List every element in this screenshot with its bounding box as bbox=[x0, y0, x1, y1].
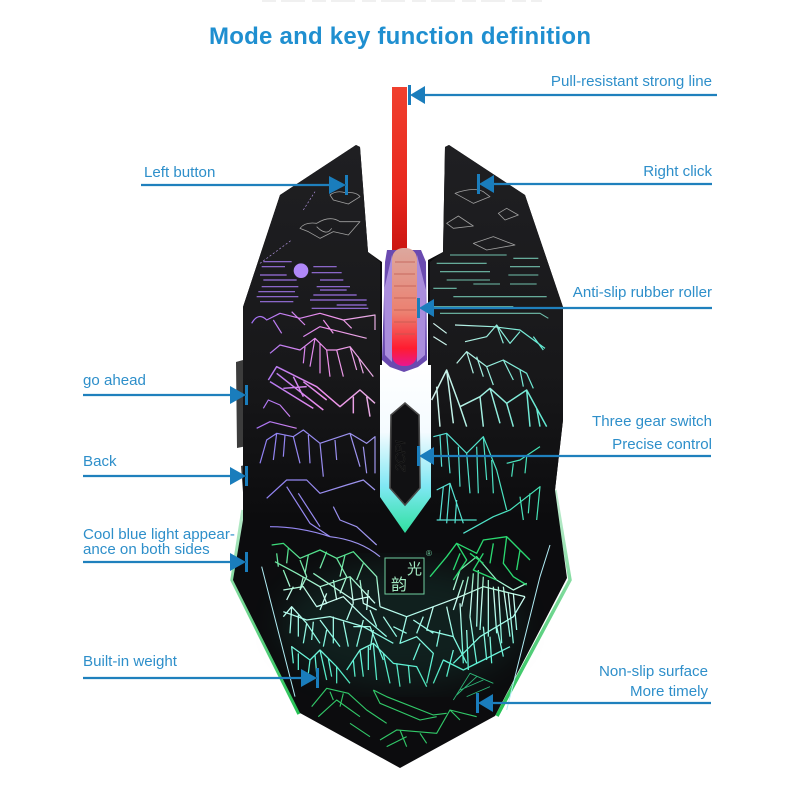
label: built-in weight: Built-in weight bbox=[83, 653, 178, 670]
label: right click bbox=[477, 163, 712, 194]
purple moon bbox=[294, 263, 308, 278]
lit line pattern upper bbox=[252, 190, 548, 428]
label: cool blue light: Cool blue light appear- bbox=[83, 526, 235, 543]
title: Mode and key function definition bbox=[209, 23, 591, 50]
label: cool blue light: ance on both sides bbox=[83, 541, 210, 558]
label: non-slip surface more timely: More timely bbox=[630, 683, 708, 700]
label: left button: Left button bbox=[144, 164, 215, 181]
logo mark bbox=[385, 549, 432, 594]
lit line pattern lower bbox=[262, 537, 550, 747]
lit line pattern middle bbox=[260, 430, 540, 557]
label: pull-resistant strong line: Pull-resistant strong line bbox=[551, 73, 712, 90]
label: anti-slip rubber roller bbox=[417, 284, 712, 318]
glow under lower pattern bbox=[280, 565, 520, 685]
label: left button bbox=[141, 164, 348, 195]
left button panel bbox=[243, 145, 380, 520]
side glow edges bbox=[232, 490, 570, 716]
logo mark: ® bbox=[426, 549, 432, 558]
label: go ahead: go ahead bbox=[83, 372, 146, 389]
center white strip bbox=[380, 365, 431, 533]
label: built-in weight bbox=[83, 653, 319, 688]
logo mark: 韵 bbox=[391, 576, 407, 594]
three gear switch button: 2CPI bbox=[392, 440, 408, 473]
label: non-slip surface more timely: Non-slip surface bbox=[599, 663, 708, 680]
label: right click: Right click bbox=[643, 163, 712, 180]
mouse body bbox=[233, 145, 567, 768]
label: three gear switch precise control bbox=[417, 413, 712, 466]
label: back: Back bbox=[83, 453, 117, 470]
label: back bbox=[83, 453, 248, 486]
label: cool blue light bbox=[83, 526, 248, 572]
right button panel bbox=[430, 145, 563, 520]
label: three gear switch precise control: Precise control bbox=[612, 436, 712, 453]
side buttons bbox=[236, 360, 258, 545]
label: go ahead bbox=[83, 372, 248, 405]
three gear switch button bbox=[390, 403, 420, 505]
label: non-slip surface more timely bbox=[476, 663, 711, 713]
mouse illustration bbox=[232, 87, 570, 768]
label: three gear switch precise control: Three gear switch bbox=[592, 413, 712, 430]
scroll wheel bbox=[382, 248, 427, 372]
logo mark: 光 bbox=[407, 561, 422, 578]
label: anti-slip rubber roller: Anti-slip rubber roller bbox=[573, 284, 712, 301]
label: pull-resistant strong line bbox=[408, 73, 717, 105]
red cable bbox=[392, 87, 407, 257]
